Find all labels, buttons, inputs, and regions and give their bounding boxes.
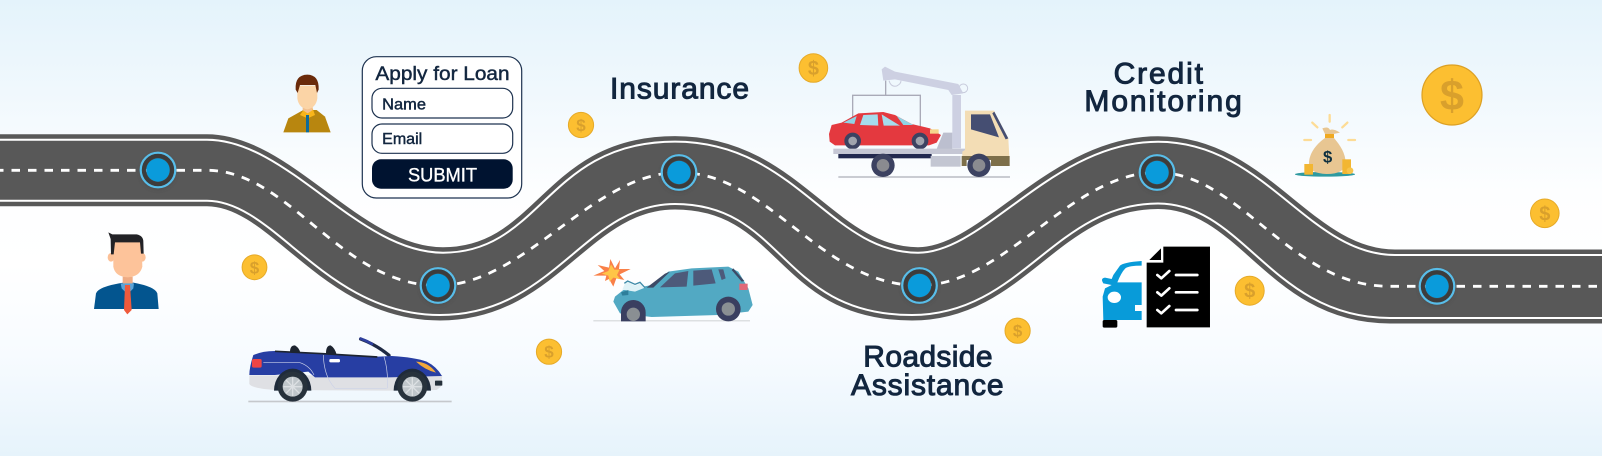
- submit button: [372, 159, 513, 189]
- heading: Roadside Assistance: Roadside: [863, 341, 992, 374]
- road node 3: [662, 155, 696, 192]
- heading: Credit Monitoring: Monitoring: [1084, 85, 1242, 118]
- email field: [372, 124, 513, 153]
- form title: Apply for Loan: [375, 63, 510, 85]
- coin: [1005, 318, 1030, 343]
- coin: $: [1440, 72, 1464, 120]
- icon: money bag: [1295, 115, 1355, 177]
- coin: [1530, 199, 1559, 228]
- email field: Email: [382, 131, 422, 148]
- coin: [242, 255, 267, 280]
- icon: crash spark: [593, 259, 631, 287]
- winding road: [0, 140, 1602, 318]
- coin: [799, 54, 828, 82]
- road node 5: [1140, 155, 1174, 192]
- icon: tow truck carrying red car: [829, 67, 1010, 178]
- road node 1: [141, 153, 175, 189]
- name field: Name: [382, 96, 426, 113]
- name field: [372, 88, 513, 118]
- coin: $: [1013, 322, 1023, 341]
- submit button: SUBMIT: [408, 165, 477, 186]
- coin: $: [1539, 203, 1550, 225]
- road node 4: [902, 268, 937, 304]
- icon: businessman in yellow shirt: [283, 75, 331, 132]
- heading: Roadside Assistance: Assistance: [851, 369, 1004, 402]
- coin: $: [544, 343, 554, 362]
- heading: Credit Monitoring: [1084, 57, 1242, 118]
- icon: money bag: $: [1323, 148, 1333, 167]
- coin: [568, 112, 594, 138]
- heading: Credit Monitoring: Credit: [1114, 57, 1204, 90]
- loan application form: [362, 57, 522, 198]
- road node 2: [421, 268, 455, 304]
- coin: [1235, 276, 1264, 305]
- coin: [536, 339, 562, 364]
- icon: blue convertible: [248, 339, 452, 402]
- road node 6: [1420, 269, 1454, 305]
- coin: $: [808, 58, 819, 80]
- coin: [1422, 65, 1482, 125]
- heading: Insurance: Insurance: [610, 72, 749, 105]
- heading: Roadside Assistance: [851, 341, 1004, 402]
- icon: businessman in blue shirt: [94, 232, 159, 314]
- icon: car with checklist: [1102, 247, 1210, 328]
- coin: $: [576, 116, 586, 135]
- coin: $: [1244, 281, 1255, 303]
- icon: crashed teal car: [593, 259, 753, 321]
- coin: $: [250, 258, 260, 277]
